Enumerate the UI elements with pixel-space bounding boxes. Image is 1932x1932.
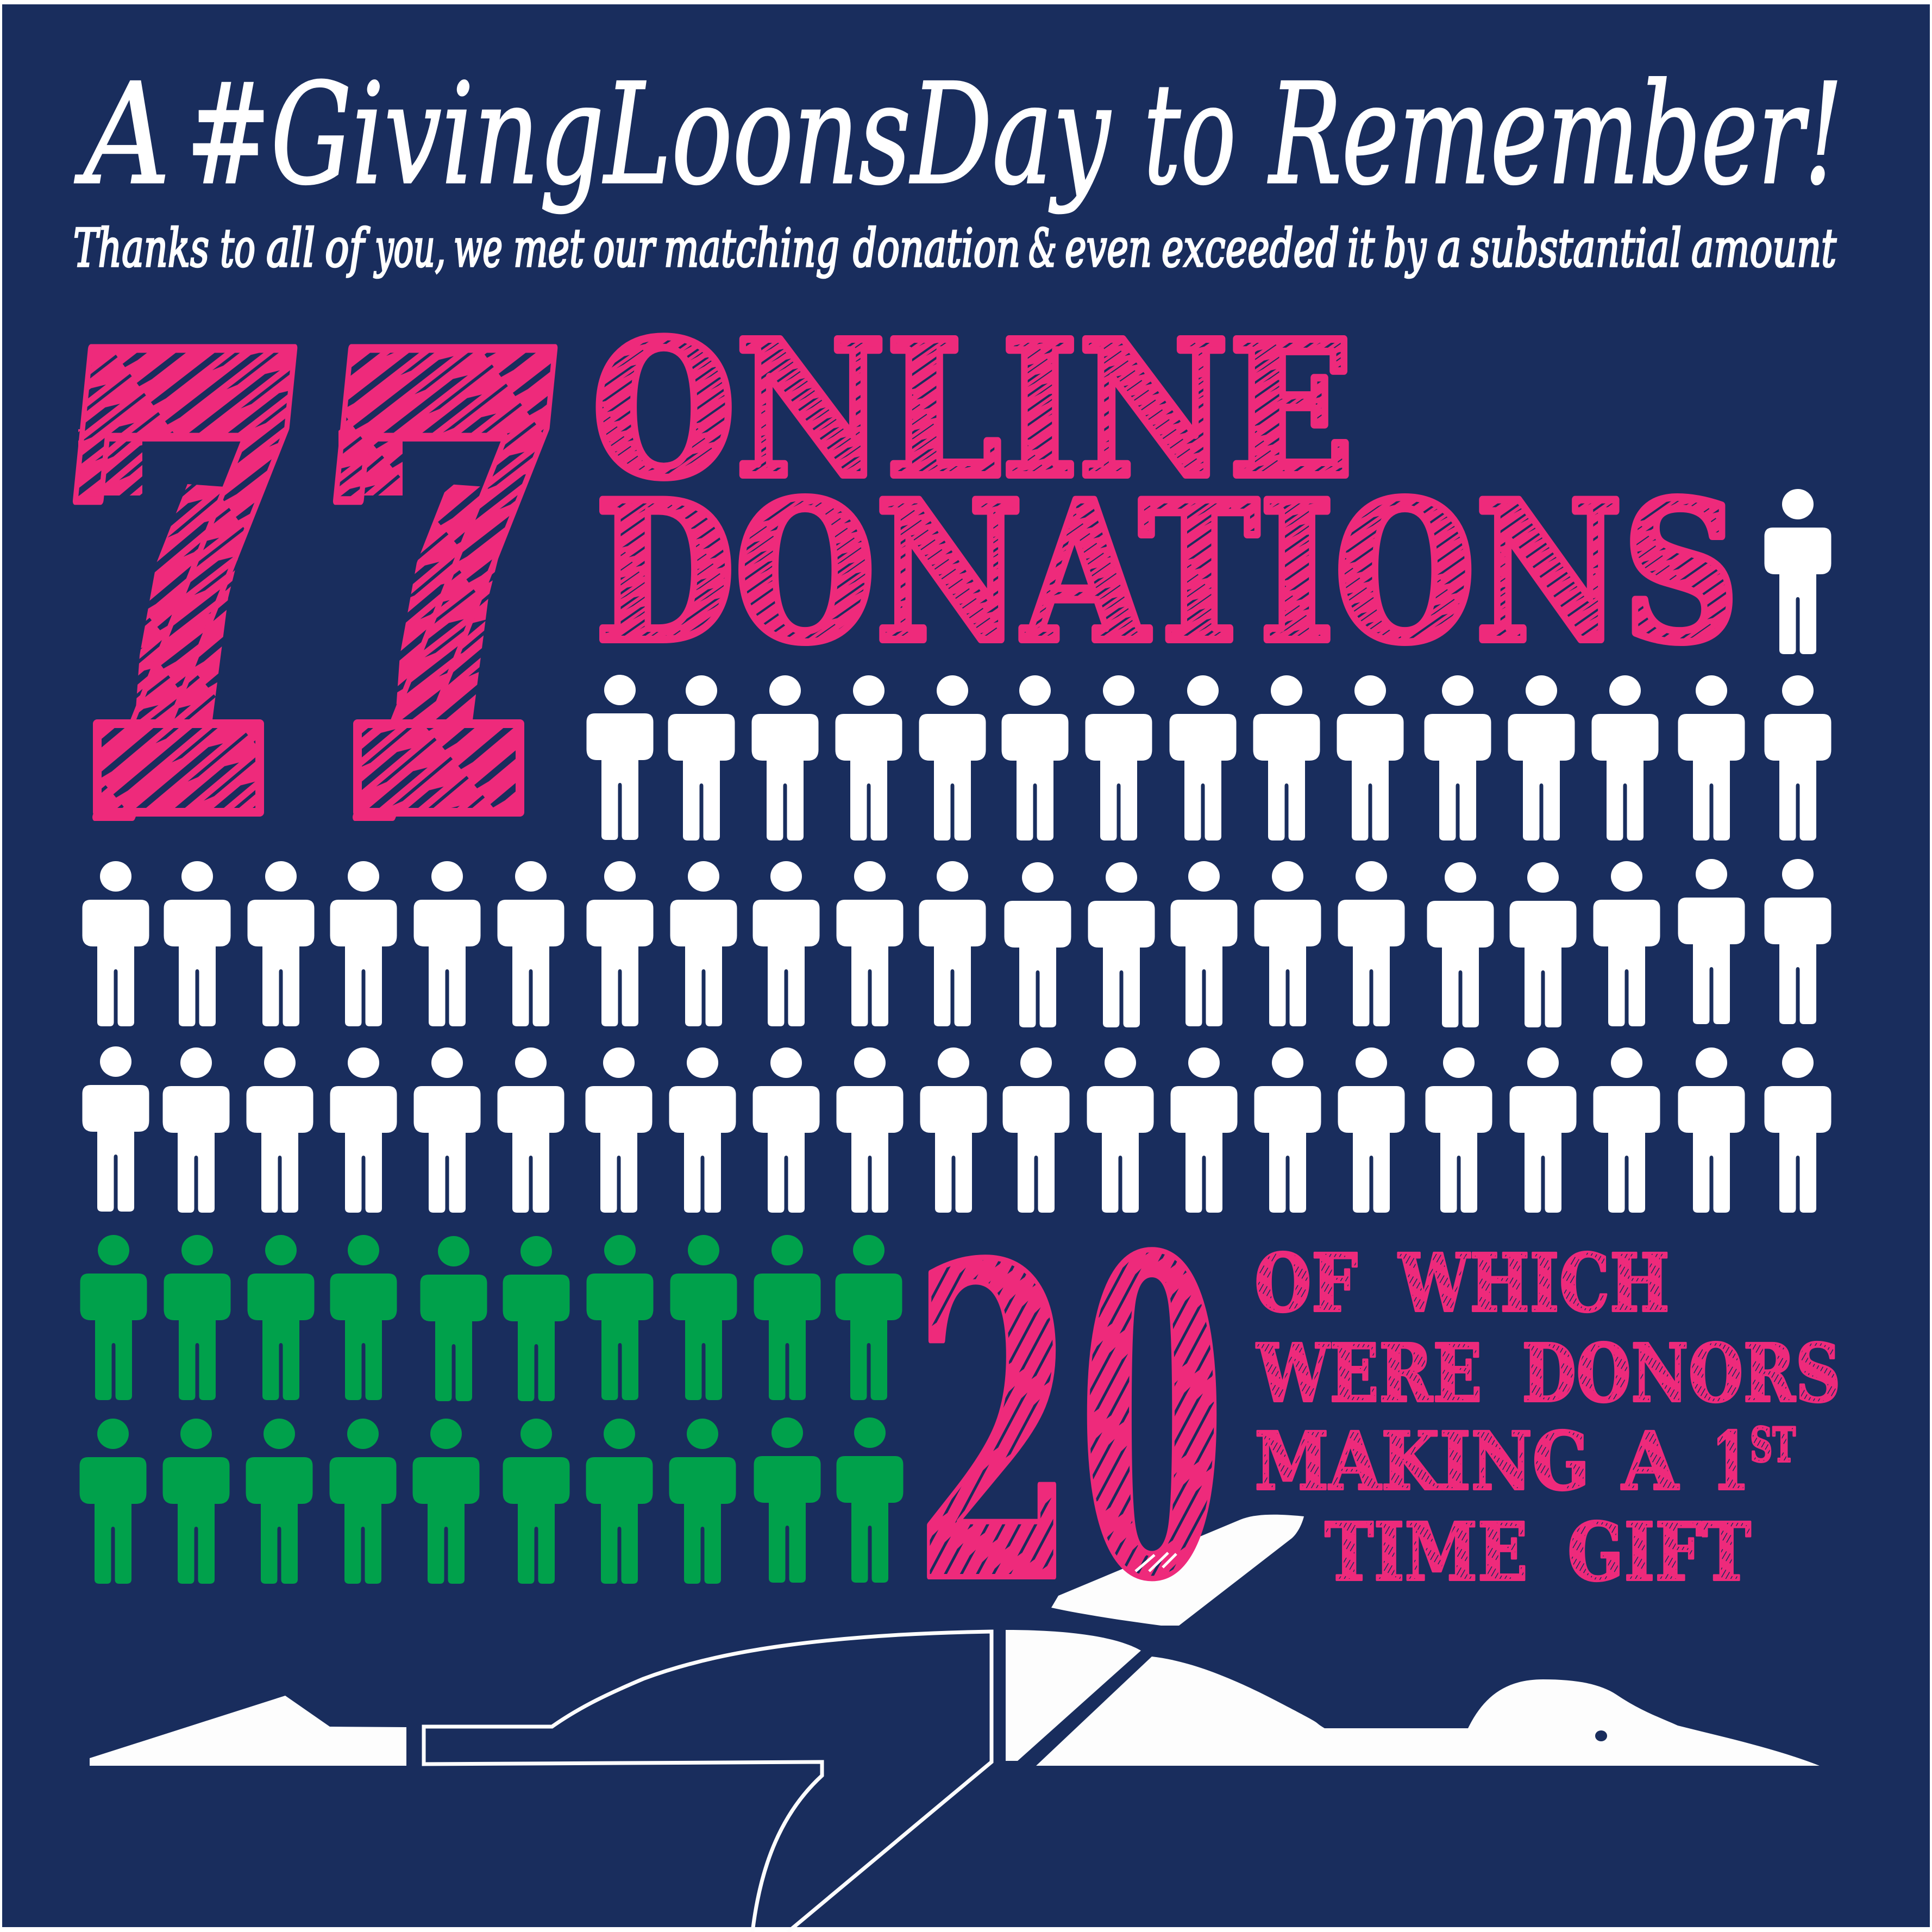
caption: of which were donors making a 1st time gift: MAKING xyxy=(1254,1414,1590,1508)
subtitle: even xyxy=(1065,218,1152,279)
subtitle: met xyxy=(513,218,584,279)
subtitle: donation xyxy=(853,218,1020,279)
subtitle: you, xyxy=(373,218,446,279)
title: to xyxy=(1144,54,1236,216)
subtitle xyxy=(73,218,1836,279)
subtitle: by xyxy=(1384,218,1427,279)
heading: online donations: DONATIONS xyxy=(595,460,1739,685)
subtitle: exceeded xyxy=(1162,218,1339,279)
subtitle: it xyxy=(1347,218,1375,279)
subtitle: Thanks xyxy=(73,218,209,279)
caption: of which were donors making a 1st time gift: WHICH xyxy=(1397,1236,1670,1330)
caption: of which were donors making a 1st time gift: WERE xyxy=(1256,1326,1482,1420)
subtitle: to xyxy=(220,218,255,279)
caption: of which were donors making a 1st time gift: OF xyxy=(1254,1236,1358,1330)
loon eye xyxy=(1595,1730,1607,1741)
people row 1: single white figure xyxy=(1765,489,1831,654)
people row 6: green first-time donors xyxy=(79,1417,903,1584)
people row 5: green first-time donors xyxy=(80,1235,902,1401)
subtitle: our xyxy=(593,218,656,279)
people row 4: white figures xyxy=(83,1046,1831,1213)
subtitle: we xyxy=(454,218,503,279)
caption: of which were donors making a 1st time gift: DONORS xyxy=(1522,1326,1841,1420)
caption: of which were donors making a 1st time gift xyxy=(1254,1236,1841,1599)
loon neck segment xyxy=(1006,1630,1141,1761)
caption: of which were donors making a 1st time gift: GIFT xyxy=(1567,1505,1751,1599)
caption: of which were donors making a 1st time gift: 1 xyxy=(1711,1414,1749,1508)
subtitle: all xyxy=(266,218,315,279)
subtitle: of xyxy=(325,218,370,279)
subtitle: amount xyxy=(1691,218,1836,279)
big number 77: 7 xyxy=(259,214,600,968)
caption: of which were donors making a 1st time gift: ST xyxy=(1750,1417,1796,1473)
title: A xyxy=(74,54,171,216)
heading: online donations: ONLINE xyxy=(592,300,1354,519)
big number 20: 2 xyxy=(913,1172,1076,1678)
loon body and head xyxy=(1036,1657,1820,1766)
subtitle: matching xyxy=(664,218,839,279)
subtitle: a xyxy=(1437,218,1461,279)
loon tail piece xyxy=(90,1696,406,1766)
people row 3: white figures xyxy=(83,859,1831,1027)
heading: online donations xyxy=(592,300,1739,685)
loon outlined wing and tail xyxy=(424,1632,992,1932)
text: 0 xyxy=(1078,1164,1225,1675)
caption: of which were donors making a 1st time gift: A xyxy=(1621,1414,1679,1508)
subtitle: substantial xyxy=(1471,218,1682,279)
title: #GivingLoonsDay xyxy=(186,54,1111,216)
caption: of which were donors making a 1st time gift: TIME xyxy=(1325,1505,1528,1599)
loon raised wing xyxy=(1051,1515,1304,1626)
subtitle: & xyxy=(1028,218,1057,279)
people row 2: white figures xyxy=(587,675,1831,840)
big number 77: 7 xyxy=(0,214,340,968)
